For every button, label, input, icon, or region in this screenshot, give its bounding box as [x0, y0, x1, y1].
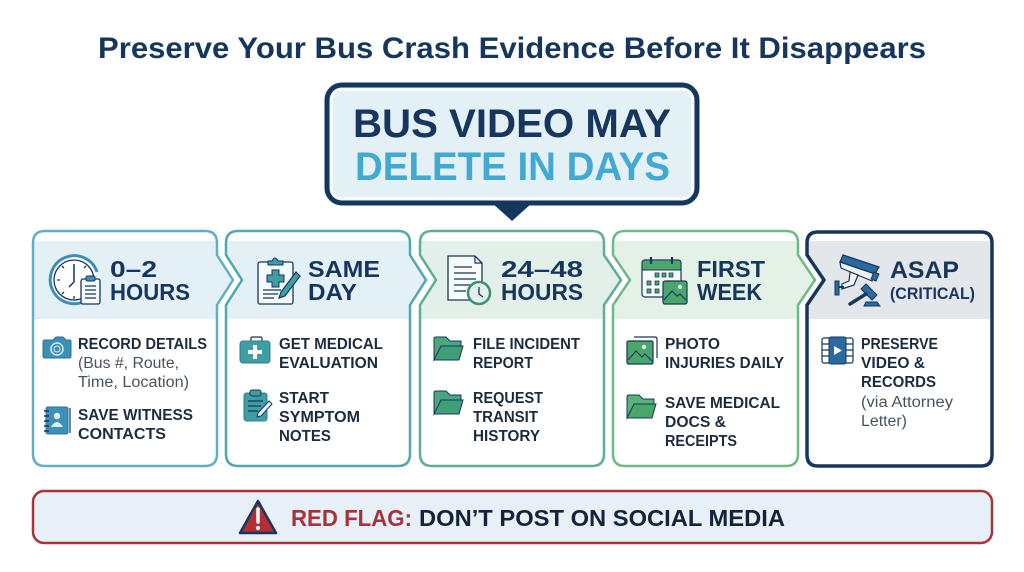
icon: video film strip: [822, 337, 853, 364]
text: start symptom notes: SYMPTOM: [279, 409, 360, 426]
text: file incident report: FILE INCIDENT: [473, 336, 580, 353]
icon: document with clock: [448, 256, 490, 304]
text: red flag message: RED FLAG:: [291, 505, 412, 531]
heading: first week: WEEK: [697, 279, 762, 305]
text: preserve video and records: VIDEO &: [861, 355, 925, 372]
text: preserve video and records: PRESERVE: [861, 336, 938, 353]
icon: medical kit: [240, 337, 270, 363]
text: photo injuries daily: [665, 336, 785, 372]
heading: same day: SAME: [308, 256, 380, 282]
heading: ASAP critical: ASAP: [890, 257, 959, 284]
icon: symptom notes clipboard: [244, 390, 272, 421]
text: record details: RECORD DETAILS: [78, 336, 207, 353]
heading: ASAP critical: (CRITICAL): [890, 284, 975, 303]
icon: address book: [44, 407, 70, 434]
text: save witness contacts: SAVE WITNESS: [78, 407, 193, 424]
text: photo injuries daily: INJURIES DAILY: [665, 355, 785, 372]
text: file incident report: REPORT: [473, 355, 533, 372]
icon: warning triangle: [240, 501, 276, 533]
icon: folder: [434, 337, 463, 360]
text: save witness contacts: [78, 407, 193, 443]
heading: same day: DAY: [308, 279, 357, 305]
text: save medical docs and receipts: RECEIPTS: [665, 433, 737, 450]
heading: ASAP critical: [890, 257, 975, 303]
text: preserve video and records: [861, 336, 953, 430]
text: record details: (Bus #, Route,: [78, 355, 179, 372]
text: start symptom notes: START: [279, 390, 330, 407]
text: get medical evaluation: [279, 336, 383, 372]
banner: red flag: [33, 491, 992, 543]
text: save witness contacts: CONTACTS: [78, 426, 166, 443]
text: get medical evaluation: EVALUATION: [279, 355, 378, 372]
text: preserve video and records: RECORDS: [861, 374, 936, 391]
icon: security camera and gavel: [835, 255, 880, 306]
text: record details: Time, Location): [78, 374, 189, 391]
icon: clipboard with cross and pencil: [258, 258, 300, 304]
heading: 24-48 hours: HOURS: [501, 279, 583, 305]
heading: 24-48 hours: [501, 256, 583, 305]
panel: ASAP critical: [807, 232, 992, 466]
heading: first week: [697, 256, 766, 305]
icon: camera: [43, 337, 71, 358]
icon: folder: [434, 391, 463, 414]
text: preserve video and records: Letter): [861, 413, 907, 430]
text: photo injuries daily: PHOTO: [665, 336, 720, 353]
text: save medical docs and receipts: DOCS &: [665, 414, 726, 431]
heading: 0-2 hours: HOURS: [110, 279, 190, 305]
icon: clock with clipboard: [50, 256, 100, 304]
callout: bus video warning: BUS VIDEO MAY: [353, 102, 671, 146]
heading: 0-2 hours: 0–2: [110, 256, 157, 282]
text: request transit history: TRANSIT: [473, 409, 539, 426]
heading: 24-48 hours: 24–48: [501, 256, 583, 282]
text: save medical docs and receipts: [665, 395, 780, 450]
icon: photo stack: [627, 337, 657, 364]
text: preserve video and records: (via Attorney: [861, 394, 953, 411]
text: request transit history: [473, 390, 543, 445]
title: Preserve Your Bus Crash Evidence Before It Disappears: [98, 32, 926, 65]
panel: same day: [226, 231, 426, 466]
heading: same day: [308, 256, 380, 305]
heading: 0-2 hours: [110, 256, 190, 305]
panel: first week: [613, 231, 815, 466]
icon: folder: [627, 395, 656, 418]
icon: calendar with photo: [642, 257, 687, 304]
heading: first week: FIRST: [697, 256, 766, 282]
callout: bus video warning: DELETE IN DAYS: [355, 145, 670, 189]
text: request transit history: REQUEST: [473, 390, 543, 407]
text: request transit history: HISTORY: [473, 428, 541, 445]
text: save medical docs and receipts: SAVE MEDICAL: [665, 395, 780, 412]
text: start symptom notes: [279, 390, 360, 445]
text: get medical evaluation: GET MEDICAL: [279, 336, 383, 353]
text: file incident report: [473, 336, 580, 372]
panel: 24-48 hours: [420, 231, 621, 466]
callout: bus video warning: [327, 85, 697, 221]
panel: 0-2 hours: [33, 231, 233, 466]
text: start symptom notes: NOTES: [279, 428, 331, 445]
text: red flag message: DON’T POST ON SOCIAL MEDIA: [419, 505, 785, 531]
text: record details: [78, 336, 207, 391]
